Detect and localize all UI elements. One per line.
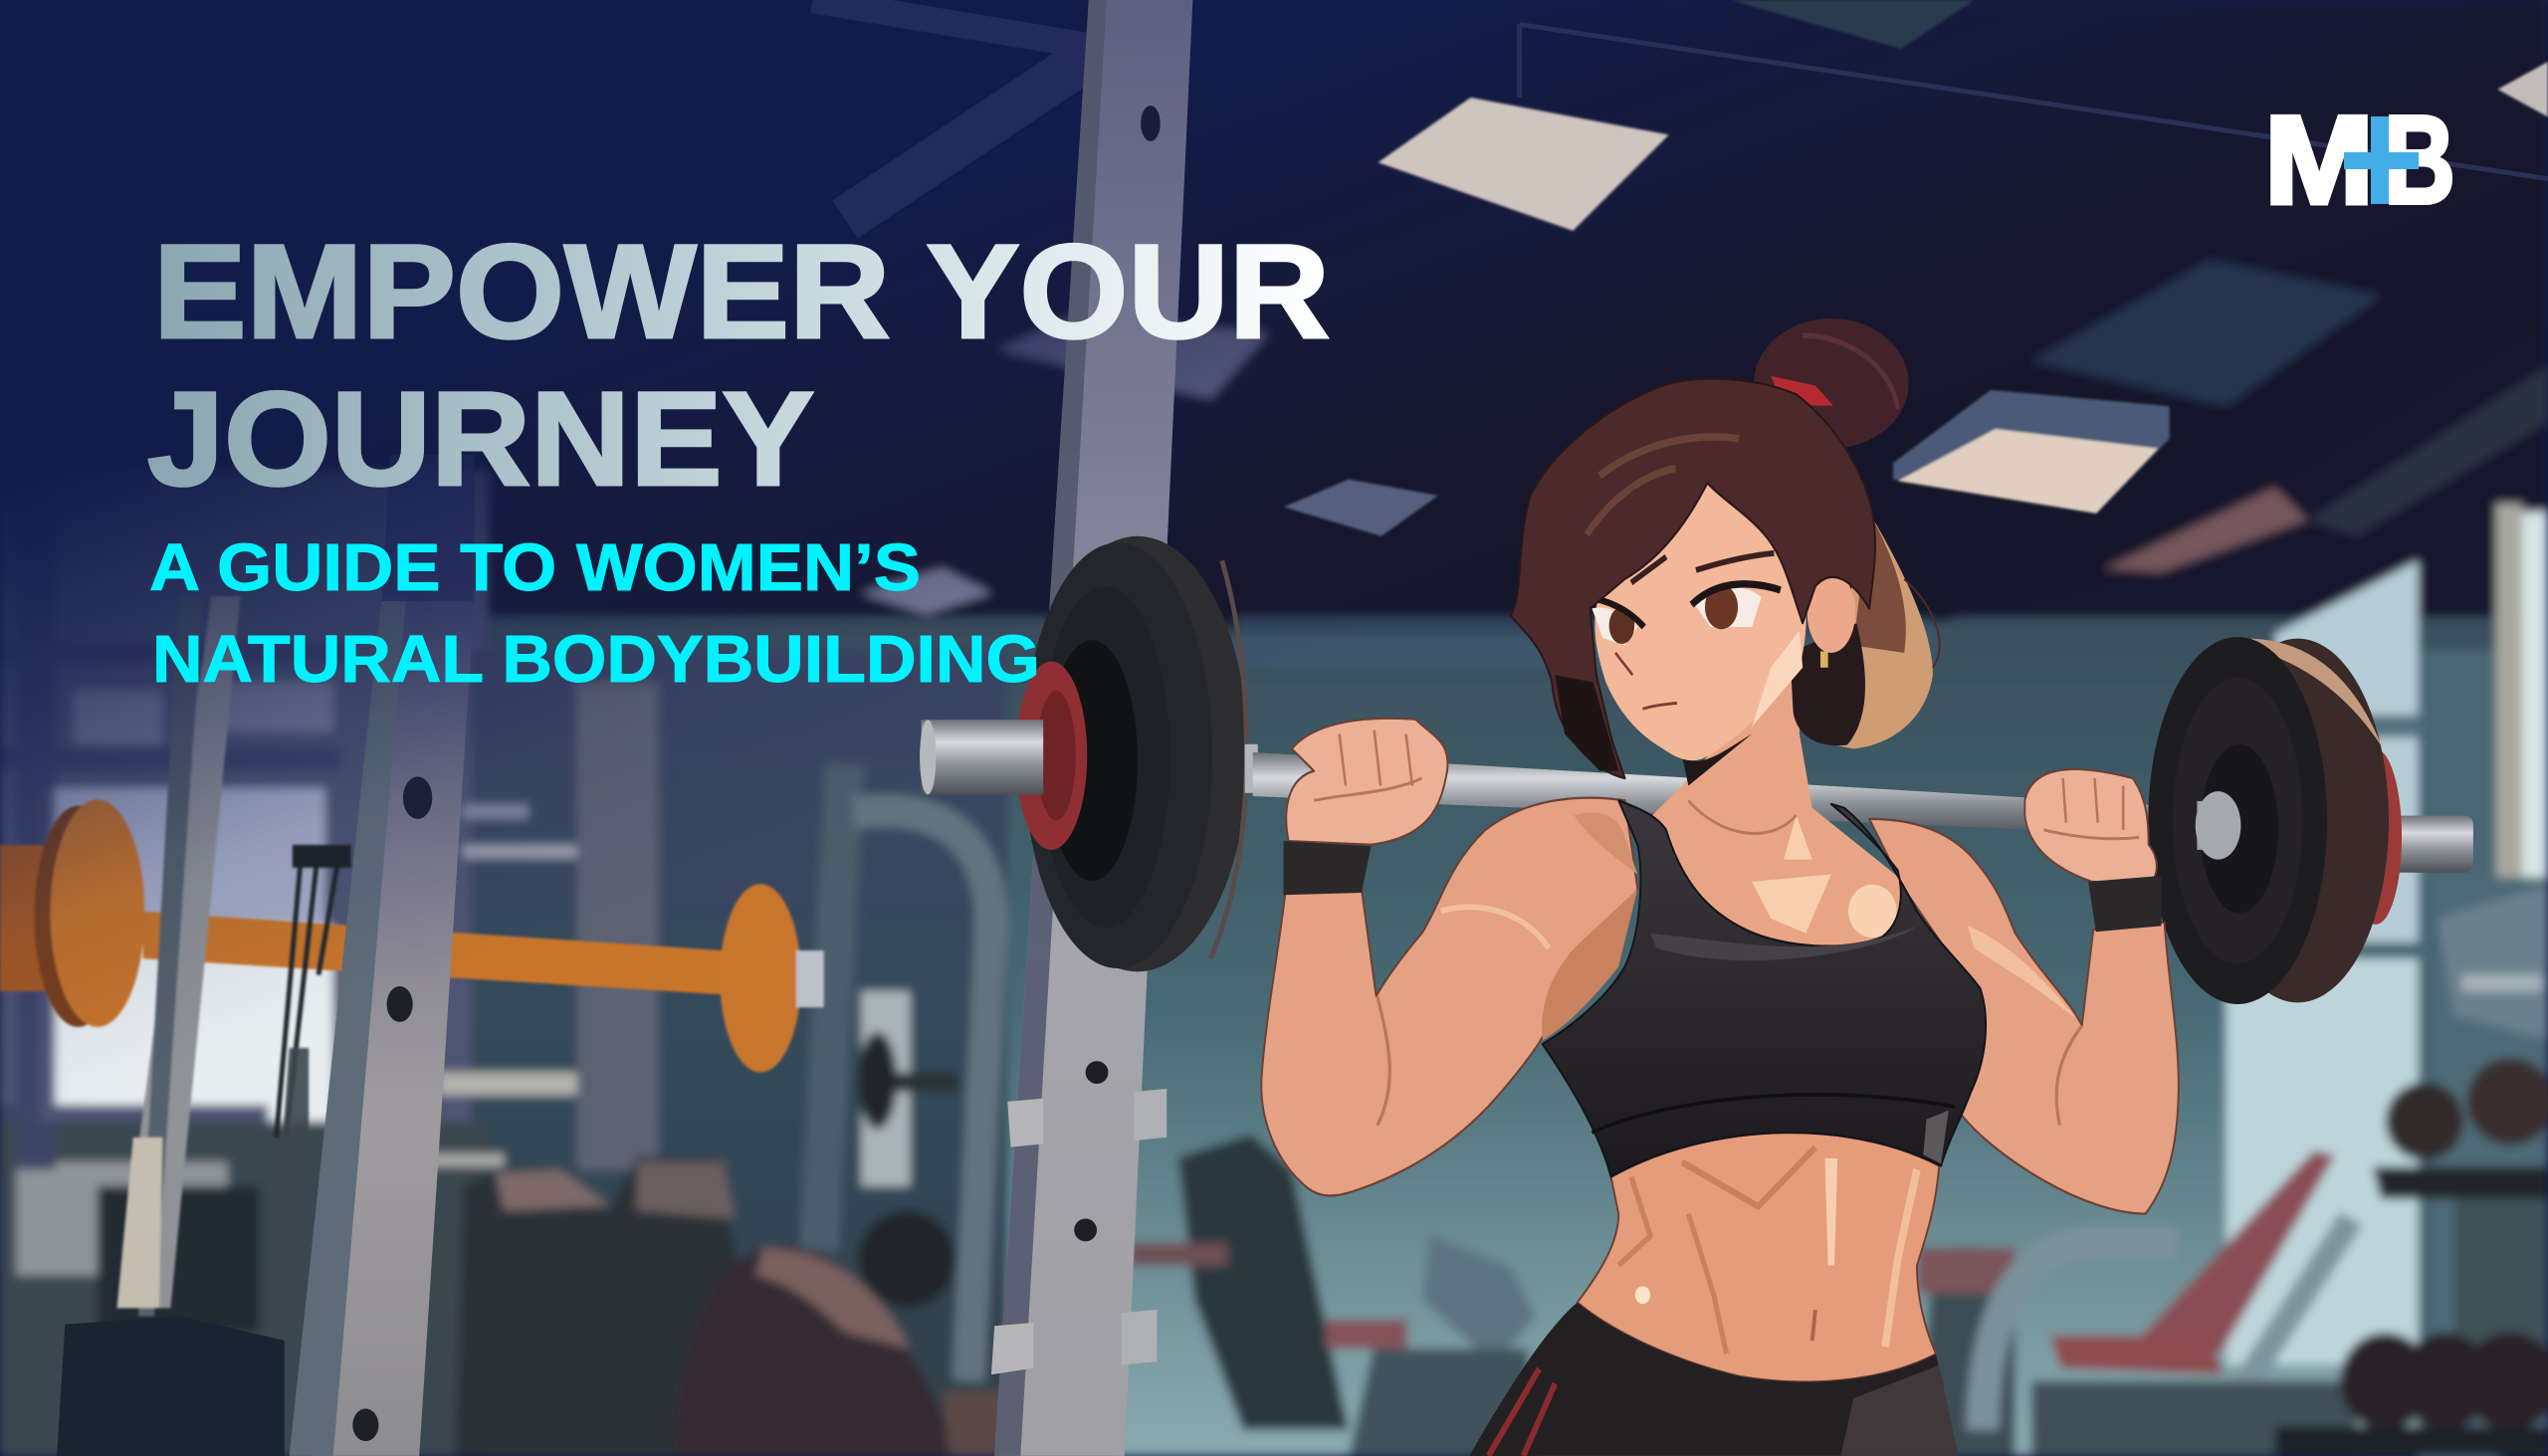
eye left bbox=[1587, 597, 1644, 646]
title line 2: JOURNEY bbox=[147, 365, 814, 514]
ceiling lights bright bbox=[1284, 0, 2548, 536]
rack post front bbox=[991, 0, 1192, 1456]
title bbox=[147, 218, 1330, 514]
leggings bbox=[1469, 1303, 1958, 1456]
cable post left bbox=[117, 596, 351, 1349]
right weight plates bbox=[2148, 637, 2473, 1004]
rack post left bbox=[290, 455, 475, 1456]
barbell bbox=[920, 536, 2473, 1004]
rack scaffold left bbox=[0, 488, 349, 1170]
windows right bbox=[2275, 560, 2418, 942]
dumbbells right bbox=[2373, 1166, 2548, 1199]
bench right bbox=[1918, 1247, 2015, 1456]
far bench bbox=[1178, 1135, 1349, 1430]
logo plus sign bbox=[2344, 116, 2419, 204]
dim ceiling lights bbox=[999, 316, 1267, 398]
pads bbox=[455, 1156, 740, 1456]
title line 1: EMPOWER YOUR bbox=[153, 218, 1330, 366]
eye right bbox=[1692, 584, 1781, 629]
ceiling beams bbox=[812, 0, 1105, 219]
eyebrows bbox=[1631, 553, 1774, 582]
bar bbox=[1253, 752, 2197, 837]
subtitle line 1: A GUIDE TO WOMEN’S bbox=[149, 530, 921, 605]
left weight plates bbox=[920, 536, 1258, 971]
logo letter B: B bbox=[2384, 90, 2455, 230]
hair front bbox=[1511, 378, 1875, 778]
subtitle line 2: NATURAL BODYBUILDING bbox=[152, 622, 1040, 697]
belly with abs bbox=[1578, 1133, 1939, 1382]
ceiling panel far bbox=[2031, 260, 2381, 406]
figure: woman lifting barbell bbox=[1261, 318, 2179, 1456]
nose and mouth bbox=[1615, 653, 1677, 709]
weight pad left bbox=[57, 1316, 285, 1456]
chest and neck bbox=[1637, 668, 1904, 948]
logo letter M: M bbox=[2264, 90, 2374, 230]
face bbox=[1587, 483, 1806, 760]
left hand and wrist bbox=[1283, 719, 1447, 895]
arm left bbox=[1261, 798, 1637, 1195]
ceiling lines bbox=[1520, 24, 2548, 179]
ceiling beam bbox=[1186, 0, 2548, 634]
hair bun bbox=[1754, 318, 1909, 448]
orange barbell bbox=[0, 799, 824, 1073]
windows left bbox=[41, 788, 325, 935]
hair back bbox=[1790, 513, 1940, 748]
arm right bbox=[1869, 819, 2179, 1214]
sports top bbox=[1543, 800, 1986, 1177]
logo bbox=[2264, 90, 2455, 230]
right hand and wrist bbox=[2024, 769, 2161, 932]
ear with earring bbox=[1807, 571, 1855, 668]
subtitle bbox=[149, 530, 1040, 697]
